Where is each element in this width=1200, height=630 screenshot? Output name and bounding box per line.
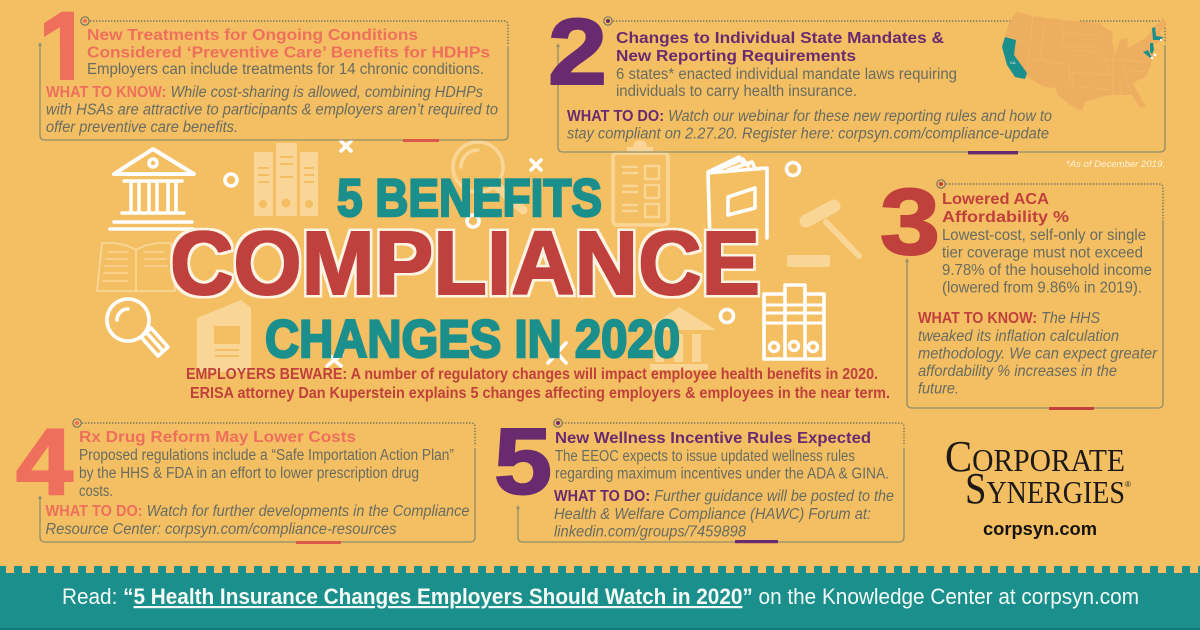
intro text: ERISA attorney Dan Kuperstein explains 5 changes affecting employers & employees in the near term. bbox=[190, 385, 890, 402]
title: Changes in 2020: CHANGES IN 2020 bbox=[265, 310, 680, 369]
title: Compliance: COMPLIANCE bbox=[170, 214, 760, 314]
panel 5: wellness incentives bbox=[494, 408, 904, 543]
body: costs. bbox=[79, 483, 113, 500]
what to know bbox=[46, 84, 498, 136]
body: Employers can include treatments for 14 chronic conditions. bbox=[87, 61, 484, 78]
icon: white magnifier bbox=[107, 299, 168, 356]
body: The EEOC expects to issue updated wellness rules bbox=[555, 448, 855, 465]
what to know bbox=[918, 310, 1158, 398]
what to do: WHAT TO DO: Watch for further developments in the Compliance bbox=[46, 503, 470, 520]
what to do: Resource Center: corpsyn.com/compliance-resources bbox=[46, 521, 397, 538]
logo: Corporate Synergies: SYNERGIES bbox=[965, 464, 1125, 513]
numeral 5: 5 bbox=[494, 408, 552, 514]
heading: New Wellness Incentive Rules Expected bbox=[555, 430, 871, 447]
icon: pale open book bbox=[97, 243, 175, 291]
what to know: WHAT TO KNOW: The HHS bbox=[918, 310, 1101, 327]
US map: CA bbox=[1010, 60, 1016, 65]
body: (lowered from 9.86% in 2019). bbox=[942, 280, 1142, 296]
numeral 2: 2 bbox=[548, 0, 607, 104]
icon: pale gavel bbox=[787, 206, 859, 267]
body: Proposed regulations include a “Safe Importation Action Plan” bbox=[79, 447, 454, 464]
what to know: with HSAs are attractive to participants & employers aren’t required to bbox=[46, 102, 498, 118]
body bbox=[555, 448, 889, 482]
panel 1 frame bbox=[38, 17, 508, 142]
what to know: tweaked its inflation calculation bbox=[918, 328, 1119, 345]
what to do bbox=[46, 503, 470, 538]
intro text: EMPLOYERS BEWARE: A number of regulatory changes will impact employee health benefits in 2020. bbox=[186, 366, 878, 383]
icon: pale clipboard bbox=[613, 140, 668, 225]
California highlighted bbox=[1002, 37, 1027, 79]
what to know: future. bbox=[918, 380, 959, 398]
body bbox=[79, 447, 454, 500]
what to know: offer preventive care benefits. bbox=[46, 119, 238, 136]
icon: white binders bbox=[764, 285, 824, 359]
panel 5 frame bbox=[516, 419, 904, 543]
panel 4: Rx drug reform bbox=[16, 409, 475, 544]
heading: Changes to Individual State Mandates & bbox=[616, 30, 944, 47]
heading: Considered ‘Preventive Care’ Benefits for HDHPs bbox=[87, 44, 490, 62]
icon: white book bbox=[708, 157, 767, 241]
numeral 3: 3 bbox=[880, 169, 940, 274]
logo: Corporate Synergies: ® bbox=[1125, 480, 1131, 489]
heading: New Treatments for Ongoing Conditions bbox=[87, 27, 418, 44]
intro text bbox=[186, 366, 890, 402]
what to do: stay compliant on 2.27.20. Register here: corpsyn.com/compliance-update bbox=[567, 126, 1049, 142]
decorative circles and crosses bbox=[225, 141, 800, 366]
footer text: Read: “5 Health Insurance Changes Employers Should Watch in 2020” on the Knowledge Center at corpsyn.com bbox=[62, 584, 1139, 609]
numeral 4: 4 bbox=[16, 409, 73, 514]
heading bbox=[87, 27, 490, 62]
logo: Corporate Synergies: corpsyn.com bbox=[983, 519, 1097, 539]
pale background icons bbox=[97, 140, 859, 372]
body: individuals to carry health insurance. bbox=[616, 83, 857, 100]
heading bbox=[942, 191, 1069, 226]
body: regarding maximum incentives under the ADA & GINA. bbox=[555, 466, 889, 482]
logo: Corporate Synergies bbox=[945, 432, 1131, 539]
body bbox=[942, 227, 1152, 296]
icon: pale bank bbox=[645, 307, 716, 370]
panel 3: ACA affordability bbox=[880, 169, 1163, 410]
heading: Rx Drug Reform May Lower Costs bbox=[79, 429, 356, 446]
icon: pale magnifier bbox=[453, 142, 523, 210]
body: tier coverage must not exceed bbox=[942, 244, 1143, 262]
what to know: affordability % increases in the bbox=[918, 363, 1117, 380]
panel 3 frame bbox=[905, 180, 1163, 410]
body: 6 states* enacted individual mandate laws requiring bbox=[616, 66, 957, 83]
panel 2: state mandates bbox=[548, 0, 1167, 169]
body bbox=[616, 66, 957, 100]
icon: pale book bbox=[197, 300, 251, 372]
highlighted eastern states bbox=[1143, 27, 1163, 58]
what to do: Health & Welfare Compliance (HAWC) Forum at: bbox=[554, 506, 871, 523]
heading: Affordability % bbox=[942, 209, 1069, 226]
what to know: WHAT TO KNOW: While cost-sharing is allowed, combining HDHPs bbox=[46, 84, 483, 101]
heading: New Reporting Requirements bbox=[616, 48, 856, 65]
icon: pale binders bbox=[254, 143, 318, 216]
heading: Lowered ACA bbox=[942, 191, 1049, 208]
icon: white bank bbox=[110, 149, 194, 229]
what to do bbox=[567, 108, 1052, 142]
body: 9.78% of the household income bbox=[942, 262, 1152, 279]
what to do: linkedin.com/groups/7459898 bbox=[554, 524, 746, 540]
body: by the HHS & FDA in an effort to lower prescription drug bbox=[79, 465, 419, 482]
what to do: WHAT TO DO: Watch our webinar for these new reporting rules and how to bbox=[567, 108, 1052, 125]
what to know: methodology. We can expect greater bbox=[918, 346, 1158, 362]
US map bbox=[1002, 12, 1167, 111]
panel 4 frame bbox=[38, 419, 475, 544]
panel 1: preventive care bbox=[38, 0, 508, 142]
body: Lowest-cost, self-only or single bbox=[942, 227, 1146, 244]
footer band bbox=[0, 573, 1200, 630]
title: 5 Benefits: 5 BENEFITS bbox=[337, 169, 602, 228]
what to do: WHAT TO DO: Further guidance will be posted to the bbox=[554, 488, 894, 505]
panel 2 frame bbox=[556, 17, 1165, 154]
logo: Corporate Synergies: CORPORATE bbox=[945, 432, 1125, 481]
heading bbox=[616, 30, 944, 65]
footnote: *As of December 2019. bbox=[1066, 159, 1165, 169]
what to do bbox=[554, 488, 894, 540]
